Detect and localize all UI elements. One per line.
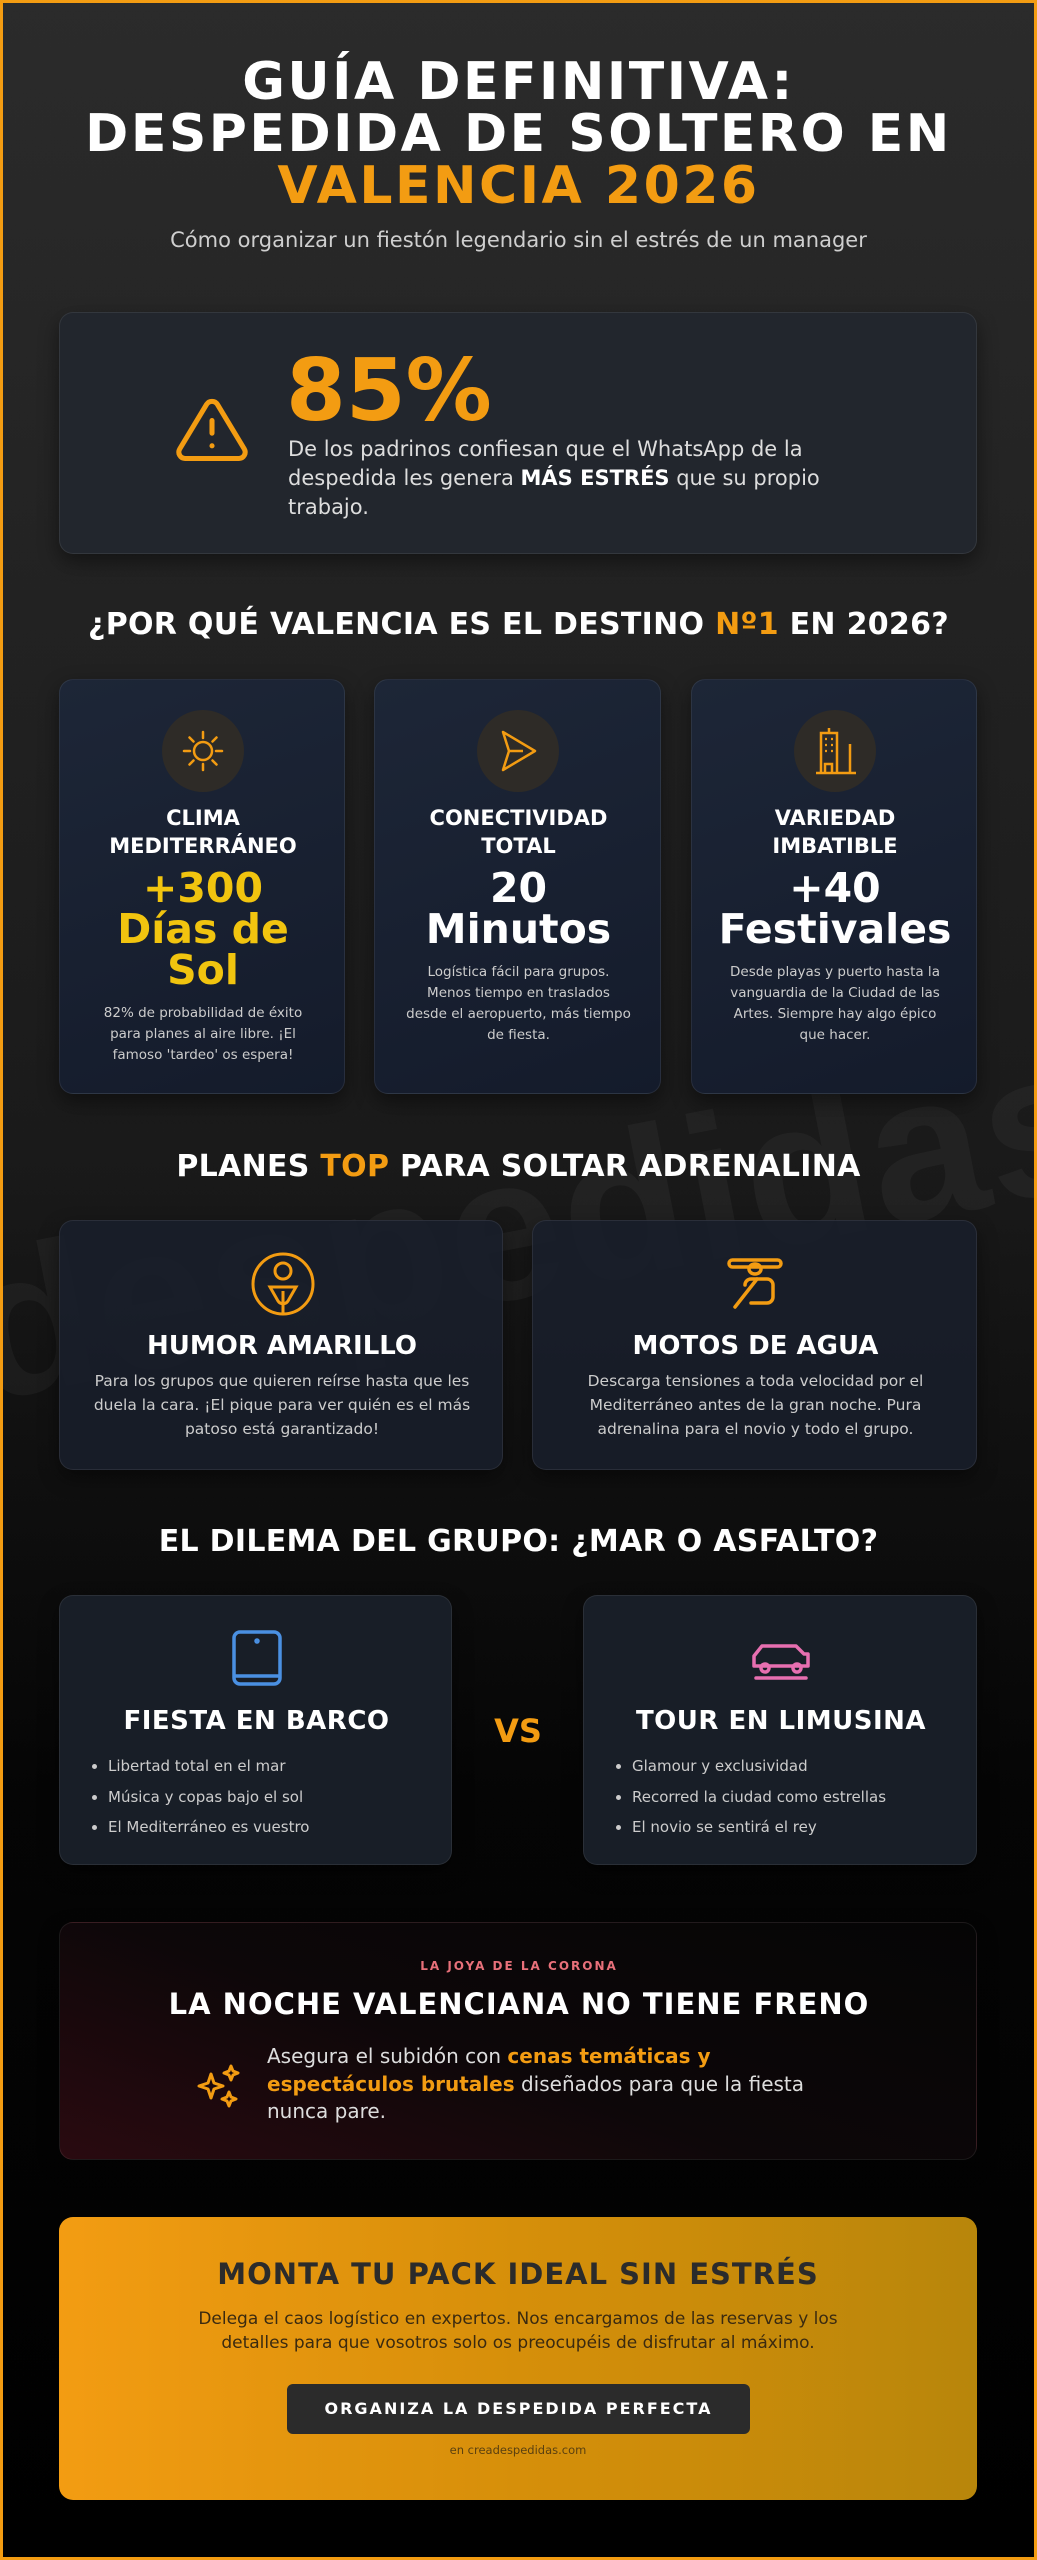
stat number: 85% — [286, 341, 492, 441]
title: DESPEDIDA DE SOLTERO EN — [85, 104, 952, 164]
panel: variedad: Desde playas y puerto hasta la vanguardia de la Ciudad de las Artes. Siempre hay algo épico que hacer. — [730, 964, 940, 1043]
list: El Mediterráneo es vuestro — [108, 1818, 309, 1836]
panel: conectividad: TOTAL — [481, 834, 556, 858]
cta text: Delega el caos logístico en expertos. Nos encargamos de las reservas y los detalles para que vosotros solo os preocupéis de disfrutar al máximo. — [198, 2309, 838, 2353]
stat text: De los padrinos confiesan que el WhatsApp de la despedida les genera MÁS ESTRÉS que su propio trabajo. — [288, 437, 820, 519]
list — [92, 1757, 309, 1836]
icon: humor — [252, 1252, 314, 1316]
panel: conectividad: Logística fácil para grupos. — [428, 964, 609, 980]
label: LA JOYA DE LA CORONA — [420, 1959, 618, 1973]
panel: variedad: IMBATIBLE — [772, 834, 898, 858]
title — [85, 51, 952, 216]
panel: tour limusina — [583, 1595, 977, 1865]
panel: conectividad: Minutos — [426, 905, 611, 953]
panel: conectividad — [374, 679, 661, 1094]
list: Libertad total en el mar — [108, 1757, 286, 1775]
vs: VS — [494, 1712, 542, 1750]
panel: stat 85% — [59, 312, 977, 554]
text: Asegura el subidón con cenas temáticas y espectáculos brutales diseñados para que la fiesta nunca pare. — [267, 2044, 804, 2123]
panel: clima: +300 — [143, 864, 263, 912]
heading: dilema: EL DILEMA DEL GRUPO: ¿MAR O ASFALTO? — [159, 1524, 878, 1559]
title: GUÍA DEFINITIVA: — [242, 52, 795, 112]
subtitle: Cómo organizar un fiestón legendario sin el estrés de un manager — [170, 228, 867, 252]
icon: sun — [162, 710, 244, 792]
panel: fiesta en barco — [59, 1595, 452, 1865]
button — [287, 2384, 750, 2434]
panel: humor amarillo: Para los grupos que quieren reírse hasta que les duela la cara. ¡El pique para ver quién es el más patoso está garantizado! — [94, 1372, 470, 1438]
panel: variedad — [691, 679, 977, 1094]
icon: send — [477, 710, 559, 792]
panel: conectividad: 20 — [490, 864, 547, 912]
panel: clima — [59, 679, 345, 1094]
panel: motos de agua — [532, 1220, 977, 1470]
list: Glamour y exclusividad — [632, 1757, 808, 1775]
panel: motos de agua: Descarga tensiones a toda velocidad por el Mediterráneo antes de la gran noche. Pura adrenalina para el novio y todo el grupo. — [588, 1372, 923, 1438]
cta heading: MONTA TU PACK IDEAL SIN ESTRÉS — [217, 2257, 819, 2291]
icon: boat/tablet — [232, 1630, 282, 1686]
icon: limo — [752, 1644, 810, 1680]
panel: motos de agua: MOTOS DE AGUA — [633, 1331, 878, 1361]
heading: planes top: PLANES TOP PARA SOLTAR ADRENALINA — [176, 1149, 861, 1184]
panel: conectividad: desde el aeropuerto, más tiempo — [406, 1006, 631, 1022]
panel: tour limusina: TOUR EN LIMUSINA — [636, 1706, 926, 1736]
panel: clima: Días de — [117, 905, 289, 953]
panel: clima: 82% de probabilidad de éxito para planes al aire libre. ¡El famoso 'tardeo' os espera! — [104, 1005, 302, 1063]
panel: conectividad: CONECTIVIDAD — [430, 806, 607, 830]
heading: LA NOCHE VALENCIANA NO TIENE FRENO — [169, 1987, 869, 2021]
heading: por qué valencia: ¿POR QUÉ VALENCIA ES EL DESTINO Nº1 EN 2026? — [88, 607, 949, 642]
panel: variedad: Festivales — [719, 905, 951, 953]
icon: sparkles — [198, 2064, 240, 2108]
panel: humor amarillo: HUMOR AMARILLO — [147, 1331, 417, 1361]
panel: noche valenciana — [59, 1922, 977, 2160]
title: VALENCIA 2026 — [277, 156, 760, 216]
icon: warning — [176, 398, 248, 461]
icon: building — [794, 710, 876, 792]
icon: jet ski — [727, 1258, 783, 1309]
panel: clima: Sol — [167, 946, 239, 994]
panel: variedad: +40 — [789, 864, 881, 912]
footer url: en creadespedidas.com — [450, 2443, 586, 2457]
panel: conectividad: Menos tiempo en traslados — [427, 985, 610, 1001]
panel: clima: MEDITERRÁNEO — [109, 834, 297, 858]
list: Música y copas bajo el sol — [108, 1788, 303, 1806]
panel: humor amarillo — [59, 1220, 503, 1470]
list — [616, 1757, 886, 1836]
panel: conectividad: de fiesta. — [487, 1027, 550, 1043]
button: ORGANIZA LA DESPEDIDA PERFECTA — [324, 2399, 712, 2418]
list: El novio se sentirá el rey — [632, 1818, 817, 1836]
panel: fiesta en barco: FIESTA EN BARCO — [123, 1706, 390, 1736]
panel: clima: CLIMA — [166, 806, 240, 830]
list: Recorred la ciudad como estrellas — [632, 1788, 886, 1806]
panel: cta — [59, 2217, 977, 2500]
panel: variedad: VARIEDAD — [775, 806, 895, 830]
